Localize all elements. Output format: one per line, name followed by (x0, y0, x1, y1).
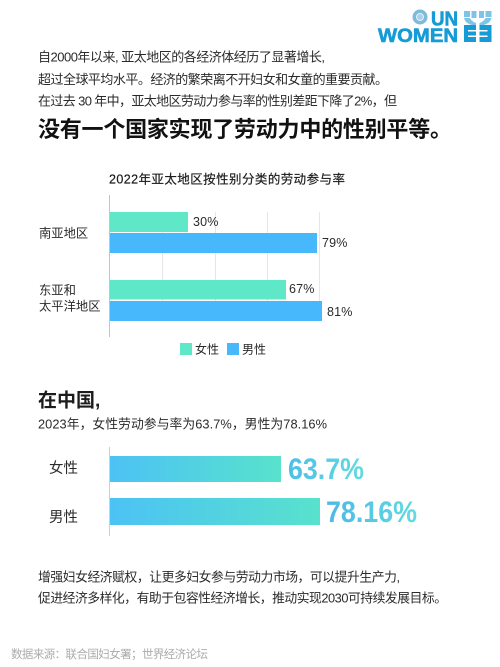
value: men: 78.16% (326, 496, 417, 529)
bar chart: labour participation by region (39, 195, 353, 337)
bar: East Asia women (110, 280, 286, 300)
value labels: 30% (193, 215, 219, 229)
logo: UN Women: UN (431, 8, 458, 30)
value labels: 79% (322, 236, 348, 250)
label: women: 女性 (49, 459, 78, 477)
source note: 数据来源：联合国妇女署；世界经济论坛 (11, 647, 208, 661)
chart title: 2022年亚太地区按性别分类的劳动参与率 (109, 172, 345, 186)
region labels: 南亚地区 (39, 226, 88, 240)
headline: 没有一个国家实现了劳动力中的性别平等。 (38, 117, 452, 142)
closing text (38, 570, 447, 606)
region labels: 东亚和 (39, 284, 76, 298)
bar: South Asia women (110, 212, 188, 232)
bar: East Asia men (110, 301, 322, 321)
bar chart: China (49, 447, 417, 536)
logo: UN Women (378, 8, 492, 47)
intro text (38, 50, 397, 108)
value labels (193, 215, 353, 319)
value: women: 63.7% (288, 453, 364, 486)
intro text: 在过去 30 年中，亚太地区劳动力参与率的性别差距下降了2%，但 (38, 94, 397, 108)
closing text: 增强妇女经济赋权，让更多妇女参与劳动力市场，可以提升生产力, (38, 570, 400, 584)
chart legend: 男性 (242, 342, 266, 356)
bar: China men (110, 498, 320, 525)
chart legend (180, 342, 266, 356)
bar: South Asia men (110, 233, 317, 253)
chart legend: 女性 (195, 342, 219, 356)
icon: UN Women emblem (464, 11, 492, 42)
logo: UN Women: WOMEN (378, 26, 458, 47)
heading: in China: 在中国, (38, 390, 100, 412)
region labels (39, 226, 100, 314)
China subtitle: 2023年，女性劳动参与率为63.7%，男性为78.16% (38, 416, 327, 432)
value labels: 67% (289, 282, 315, 296)
intro text: 超过全球平均水平。经济的繁荣离不开妇女和女童的重要贡献。 (38, 72, 388, 87)
intro text: 自2000年以来, 亚太地区的各经济体经历了显著增长, (38, 50, 325, 64)
icon: UN globe (412, 10, 428, 24)
value labels: 81% (327, 305, 353, 319)
closing text: 促进经济多样化，有助于包容性经济增长，推动实现2030可持续发展目标。 (38, 590, 447, 606)
label: men: 男性 (49, 509, 78, 526)
bar: China women (110, 456, 281, 482)
region labels: 太平洋地区 (39, 298, 100, 314)
